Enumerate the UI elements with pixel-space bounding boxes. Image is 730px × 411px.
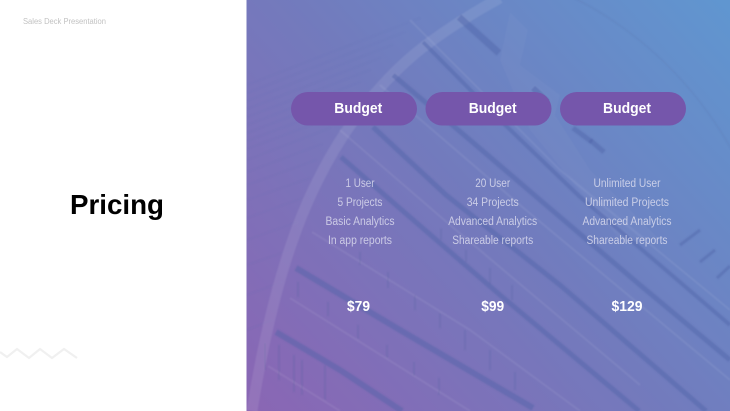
- window mullions: [264, 252, 516, 399]
- features list 1: Basic Analytics: [326, 216, 395, 228]
- arch rib: [252, 0, 500, 411]
- pill button 2: Budget: [469, 100, 517, 117]
- top-left fine lines: [247, 18, 420, 330]
- price 3: $129: [612, 299, 642, 315]
- features list 2: 34 Projects: [467, 197, 519, 209]
- column 1: budget plan: [291, 92, 417, 315]
- features list 2: [448, 178, 537, 247]
- features list 1: [326, 178, 395, 247]
- features list 2: Shareable reports: [452, 235, 533, 247]
- pale ledges: [277, 20, 566, 402]
- pill button 3: [560, 92, 686, 126]
- pill button 3: Budget: [603, 100, 651, 117]
- pill button 1: Budget: [334, 100, 382, 117]
- features list 1: In app reports: [328, 235, 392, 247]
- spiral fins, light area: [604, 214, 625, 232]
- features list 3: Unlimited User: [594, 178, 661, 190]
- dome edge: [570, 0, 730, 150]
- features list 1: 1 User: [346, 178, 375, 190]
- features list 3: Advanced Analytics: [582, 216, 672, 228]
- features list 2: Advanced Analytics: [448, 216, 537, 228]
- pill button 1: [291, 92, 417, 126]
- features list 3: [582, 178, 672, 247]
- price 2: $99: [481, 299, 504, 315]
- column 2: budget plan: [426, 92, 552, 315]
- column 3: budget plan: [560, 92, 686, 315]
- features list 2: 20 User: [475, 178, 510, 190]
- running header: Sales Deck Presentation: [23, 17, 106, 26]
- price 1: $79: [347, 299, 370, 315]
- pill button 2: [426, 92, 552, 126]
- title: Pricing: [70, 189, 164, 220]
- dark balcony bands: [276, 17, 730, 411]
- panel: building photo with gradient: [246, 0, 730, 411]
- decorative zigzag: [0, 349, 77, 358]
- features list 3: Shareable reports: [586, 235, 668, 247]
- features list 3: Unlimited Projects: [585, 197, 669, 209]
- features list 1: 5 Projects: [338, 197, 383, 209]
